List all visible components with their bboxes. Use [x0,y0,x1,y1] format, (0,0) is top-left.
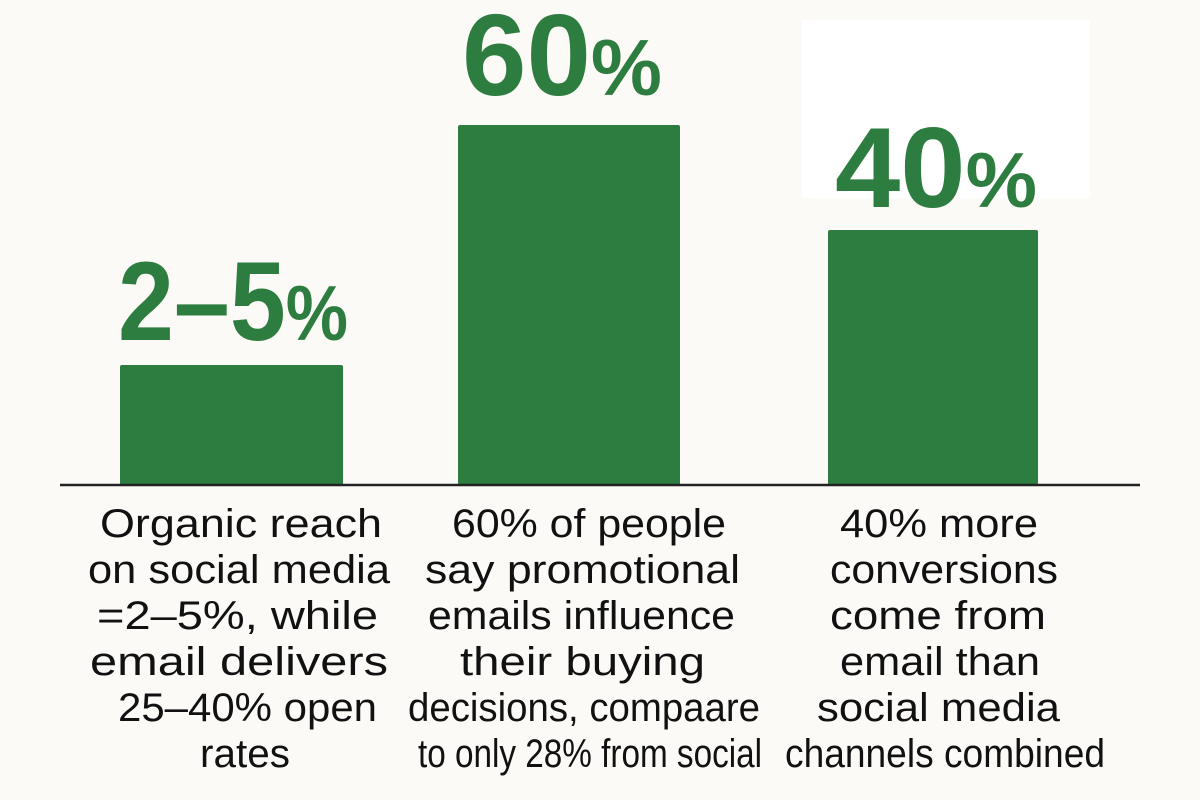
text block: promotional emails: 60% of people [452,502,726,546]
bar chart [60,125,1140,485]
value label: 2-5%: 2–5% [118,239,348,364]
bar: conversions [828,230,1038,485]
bar: promotional emails [458,125,680,485]
text block: organic reach: on social media [88,548,391,592]
white highlight panel [802,20,1090,198]
text block: promotional emails: decisions, compaare [408,686,760,730]
text block: organic reach: 25–40% open [118,686,377,730]
bar: organic reach [120,365,343,485]
text block: conversions: social media [817,686,1061,730]
baseline axis [60,484,1140,486]
text block: conversions: 40% more [840,502,1038,546]
text block: organic reach: Organic reach [100,502,382,546]
text block: promotional emails: emails influence [428,594,735,638]
text block: organic reach [88,502,391,776]
text block: promotional emails: their buying [460,640,705,684]
value label: 40%: 40% [835,105,1037,232]
text block: conversions: conversions [830,548,1058,592]
text block: organic reach: rates [200,732,290,776]
text block: organic reach: email delivers [90,640,388,684]
text block: organic reach: =2–5%, while [97,594,378,638]
text block: promotional emails [408,502,762,776]
text block: promotional emails: say promotional [425,548,740,592]
text block: conversions [785,502,1105,776]
text block: conversions: come from [830,594,1046,638]
text block: promotional emails: to only 28% from social [418,732,762,776]
text block: conversions: email than [840,640,1040,684]
text block: conversions: channels combined [785,732,1105,776]
